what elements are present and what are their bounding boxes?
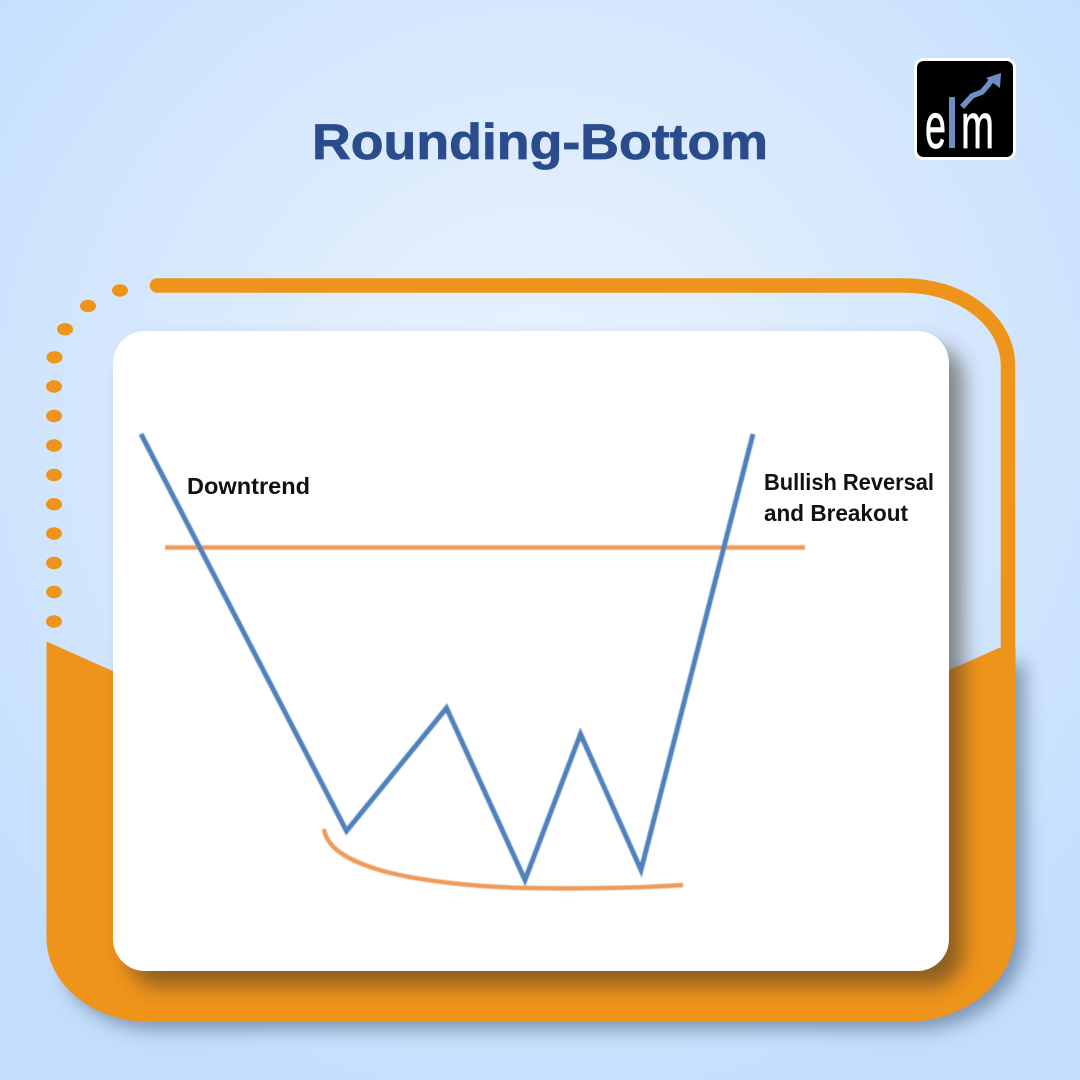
panel: orange frame top line xyxy=(157,286,1008,660)
icon: elm logo: m xyxy=(961,90,994,162)
label: bullish reversal and breakout: Bullish Reversal xyxy=(764,469,934,495)
decorative dotted arc xyxy=(46,284,128,628)
frame shadow xyxy=(69,663,1025,1030)
card shadow xyxy=(128,346,963,986)
panel: white chart card xyxy=(113,331,949,971)
chart: rounding bottom pattern xyxy=(141,434,805,888)
rounded support curve xyxy=(324,829,683,888)
title: Rounding-Bottom xyxy=(312,114,768,170)
icon: elm logo xyxy=(916,60,1014,162)
label: downtrend: Downtrend xyxy=(187,473,310,499)
label: bullish reversal and breakout xyxy=(764,469,934,526)
price line xyxy=(141,434,753,880)
panel: orange base xyxy=(46,642,1016,1022)
label: bullish reversal and breakout: and Breakout xyxy=(764,500,908,526)
icon: elm logo: e xyxy=(925,90,946,162)
resistance line xyxy=(165,545,805,550)
